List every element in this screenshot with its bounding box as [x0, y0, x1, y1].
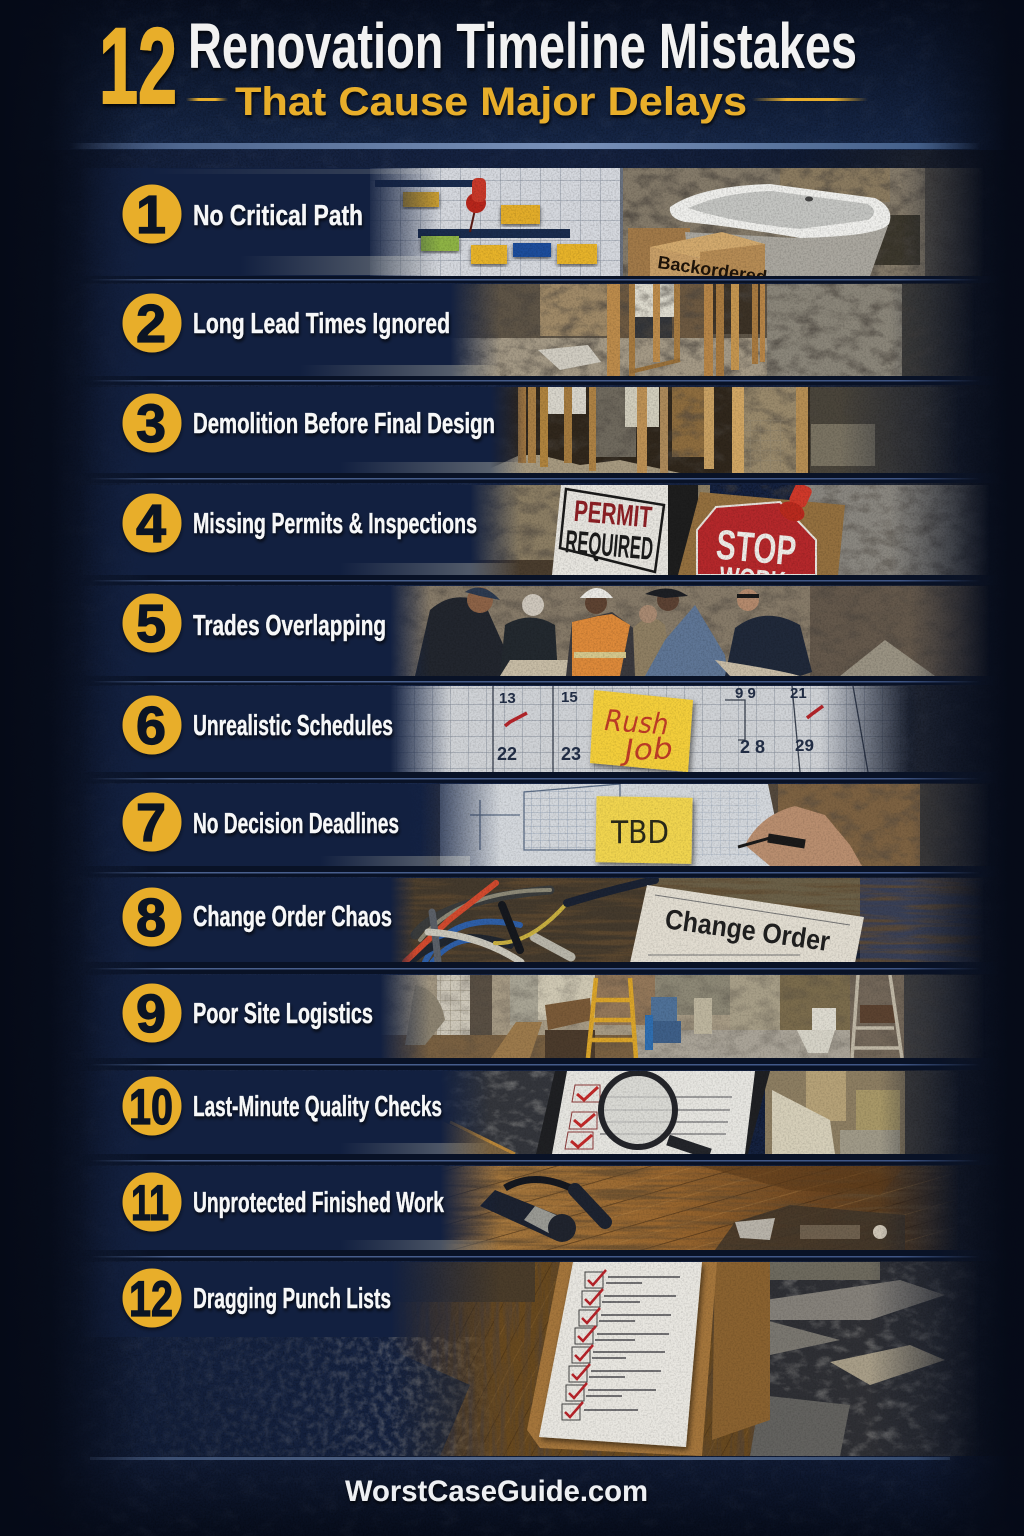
- row 8: Change Order Chaos: [104, 878, 976, 962]
- scene: exposed studs: [440, 284, 982, 376]
- calendar dates: 22: [497, 744, 517, 764]
- number badge 8: 8: [136, 888, 166, 948]
- number badge 1: [122, 184, 182, 245]
- number badge 6: [122, 696, 182, 756]
- box label: Backordered: [656, 252, 768, 287]
- scene: blueprint with TBD note: [400, 784, 990, 866]
- permit sign text: PERMIT: [573, 495, 653, 535]
- number badge 5: [122, 594, 182, 654]
- label 2: Long Lead Times Ignored: [193, 308, 450, 340]
- row 1: No Critical Path: [100, 168, 974, 276]
- number badge 5: 5: [136, 594, 166, 654]
- label 10: Last-Minute Quality Checks: [193, 1091, 442, 1123]
- number badge 1: 1: [136, 185, 166, 245]
- label 4: Missing Permits & Inspections: [193, 508, 477, 540]
- subtitle rule left: [186, 98, 228, 101]
- label 3: Demolition Before Final Design: [193, 408, 495, 440]
- calendar dates: 2 8: [740, 737, 765, 757]
- hand with pen: [738, 806, 862, 866]
- paper heading: Change Order: [663, 903, 832, 957]
- tangled cables: [405, 880, 655, 962]
- number badge 11: 11: [131, 1175, 169, 1231]
- permit sign text: REQUIRED: [564, 523, 655, 567]
- label 8: Change Order Chaos: [193, 901, 392, 933]
- number badge 8: [122, 888, 182, 948]
- number badge 6: 6: [136, 696, 166, 756]
- subtitle rule right: [752, 98, 868, 101]
- stop sign text: WORK: [718, 561, 787, 600]
- number badge 4: [122, 494, 182, 554]
- row 7: No Decision Deadlines: [105, 784, 977, 866]
- label 1: No Critical Path: [193, 200, 363, 232]
- title subtitle: That Cause Major Delays: [235, 80, 747, 124]
- calendar dates: 21: [790, 685, 807, 702]
- calendar dates: 15: [561, 689, 578, 706]
- row 3: Demolition Before Final Design: [104, 387, 940, 473]
- calendar dates: 23: [561, 744, 581, 764]
- footer website: WorstCaseGuide.com: [345, 1475, 648, 1508]
- red pushpin: [780, 485, 812, 522]
- check marks: [565, 1085, 732, 1149]
- scene: gantt board and backordered tub: [370, 168, 974, 276]
- scene: crowded workers: [390, 586, 1000, 676]
- label 9: Poor Site Logistics: [193, 998, 373, 1030]
- row 9: Poor Site Logistics: [0, 975, 1000, 1058]
- sticky note text: Rush: [604, 703, 670, 741]
- number badge 7: [122, 792, 182, 853]
- checklist items: [562, 1270, 680, 1420]
- stop sign text: STOP: [714, 521, 798, 574]
- scene: calendar with rush job note: [390, 685, 920, 772]
- scene: punch list on corkboard in rubble: [380, 1262, 990, 1456]
- number badge 9: 9: [136, 984, 166, 1044]
- title numeral 12: 12: [99, 5, 177, 126]
- row 12: Dragging Punch Lists: [0, 1262, 1000, 1456]
- number badge 10: 10: [129, 1079, 173, 1135]
- sticky note text: [604, 709, 672, 766]
- label 6: Unrealistic Schedules: [193, 710, 393, 742]
- row 4: Missing Permits & Inspections: [104, 485, 983, 575]
- row 11: Unprotected Finished Work: [0, 1166, 1000, 1250]
- scene: demolished wall: [480, 387, 960, 473]
- scene: wires and change order paper: [380, 878, 990, 963]
- magnifier: [601, 1073, 710, 1154]
- title block: [99, 5, 868, 126]
- number badge 3: 3: [136, 394, 166, 454]
- power tool: [480, 1179, 605, 1242]
- label 5: Trades Overlapping: [193, 610, 386, 642]
- number badge 7: 7: [136, 793, 166, 853]
- number badge 2: 2: [136, 294, 166, 354]
- row 5: Trades Overlapping: [103, 586, 982, 676]
- permit sign text: [566, 500, 652, 562]
- calendar dates: [497, 685, 814, 764]
- label 11: Unprotected Finished Work: [193, 1187, 445, 1219]
- note text: TBD: [610, 815, 669, 851]
- scene: cluttered rooms: [380, 975, 990, 1058]
- stop sign text: [716, 530, 796, 575]
- label 12: Dragging Punch Lists: [193, 1283, 391, 1315]
- label 7: No Decision Deadlines: [193, 808, 399, 840]
- number badge 12: 12: [129, 1271, 173, 1327]
- scene: permit and stop work signs: [474, 485, 983, 575]
- calendar dates: 13: [499, 690, 516, 707]
- number badge 2: [122, 294, 182, 354]
- row 6: Unrealistic Schedules: [104, 686, 906, 772]
- scene: damaged hardwood and tool: [430, 1166, 960, 1250]
- row 10: Last-Minute Quality Checks: [0, 1071, 1000, 1154]
- row 2: Long Lead Times Ignored: [104, 284, 960, 376]
- number badge 4: 4: [136, 494, 166, 554]
- sticky note text: Job: [619, 731, 673, 767]
- number badge 3: [122, 394, 182, 454]
- calendar dates: 29: [795, 736, 814, 755]
- number badge 9: [122, 984, 182, 1044]
- scene: clipboard under magnifier: [430, 1071, 965, 1154]
- calendar dates: 9 9: [735, 685, 756, 702]
